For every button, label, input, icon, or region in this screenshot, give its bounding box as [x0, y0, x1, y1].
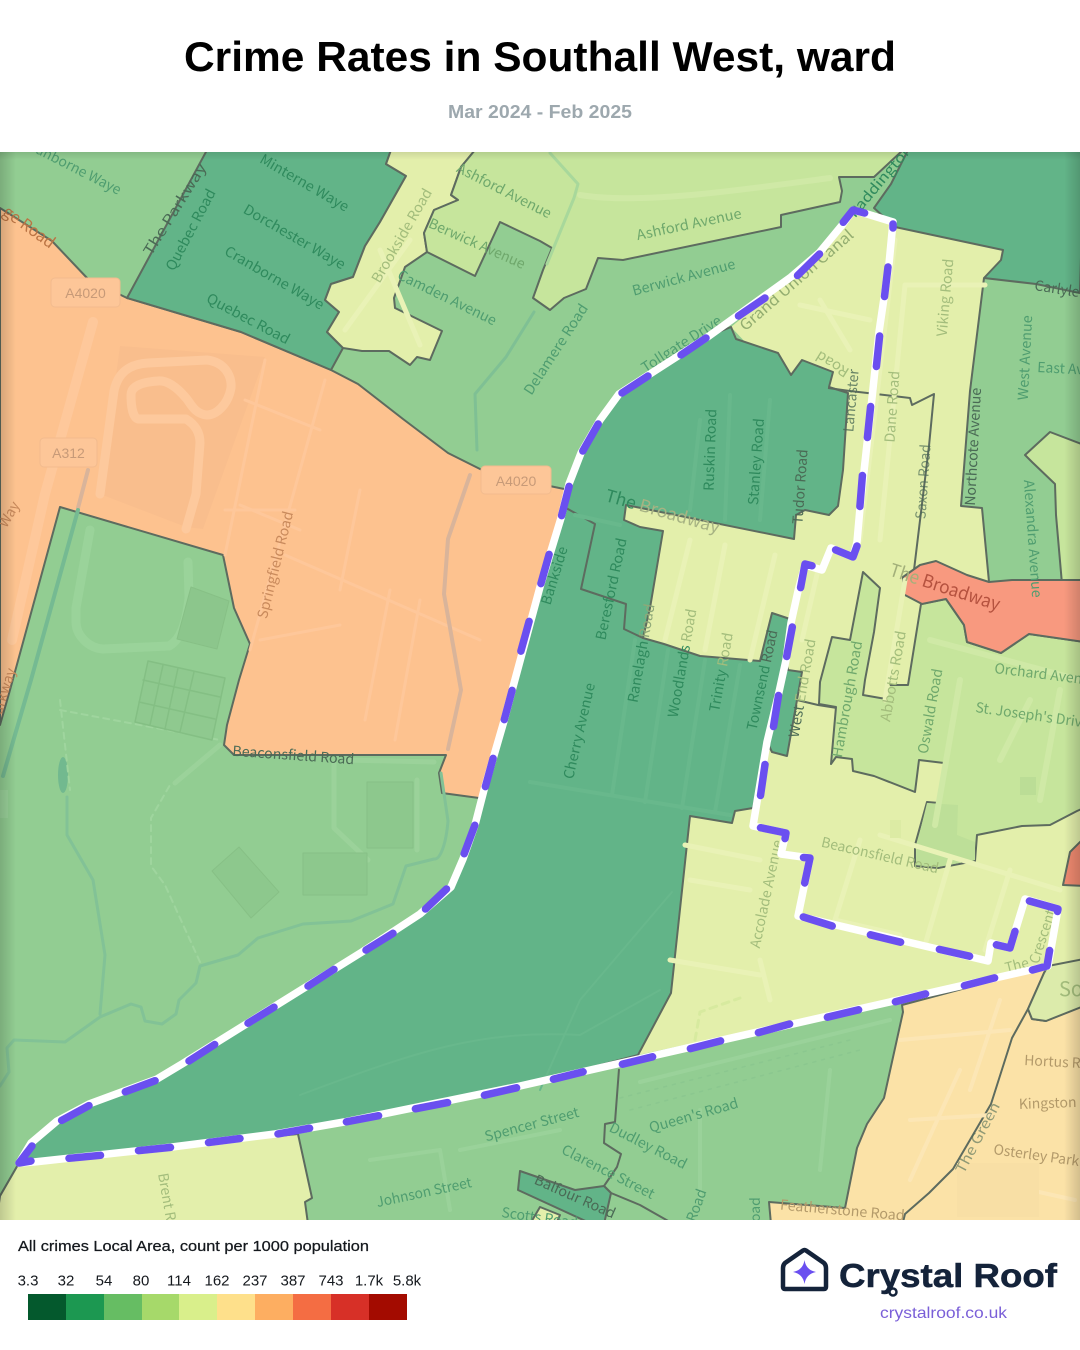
street labels: Featherstone Road [779, 1195, 906, 1225]
legend scale values: 114 [167, 1272, 191, 1290]
street labels: Balfour Road [531, 1170, 619, 1223]
street labels: Minterne Waye [256, 149, 353, 216]
street labels: Grand Union Canal [735, 224, 858, 335]
street labels: Dane Road [880, 370, 904, 443]
street labels: The Broadway [886, 556, 1004, 617]
street labels: Beresford Road [591, 536, 632, 642]
area: dark green ward block [19, 327, 848, 1163]
street labels: Hambrough Road [827, 639, 867, 759]
area: Broadway red [903, 561, 1080, 653]
street labels: Cherry Avenue [558, 681, 600, 781]
street labels: Oswald Road [913, 667, 947, 755]
road shields [40, 278, 551, 494]
street labels: The Green [950, 1099, 1005, 1177]
street labels: Road [812, 346, 853, 382]
street labels: Dorchester Waye [240, 199, 350, 274]
street labels: Brookside Road [367, 185, 437, 286]
legend scale values: 743 [318, 1272, 344, 1290]
street labels: Berwick Avenue [425, 213, 529, 274]
street labels: The Parkway [138, 159, 212, 259]
subtitle: date range: Mar 2024 - Feb 2025 [448, 102, 632, 122]
street labels: Delamere Road [519, 300, 593, 399]
street labels: Quebec Road [203, 288, 294, 349]
street labels: Saxon Road [910, 444, 936, 520]
street labels: Tollgate Drive [637, 310, 726, 377]
street labels: Scotts Road [500, 1202, 579, 1233]
street labels: West Avenue [1013, 315, 1037, 401]
legend title: All crimes Local Area, count per 1000 population [18, 1239, 369, 1255]
area: south west pale [0, 1134, 312, 1224]
street labels: Ranelagh Road [623, 602, 660, 704]
street labels: Abbotts Road [875, 629, 911, 723]
street labels: Crescent [1024, 906, 1061, 966]
area: Oswald light green [819, 572, 1080, 868]
area: tan south east [769, 966, 1080, 1224]
street labels: Lancaster [838, 368, 864, 433]
area: Quebec dark green [127, 150, 406, 370]
street labels: Townsend Road [742, 628, 782, 732]
street labels: West End Road [784, 637, 821, 739]
ward boundary: white casing with violet dashes [19, 210, 1058, 1163]
street labels: Ruskin Road [699, 409, 721, 491]
street labels: Dudley Road [606, 1117, 691, 1174]
legend scale values: 80 [133, 1272, 149, 1290]
street labels: Spencer Street [482, 1102, 582, 1146]
street labels: Berwick Avenue [630, 254, 738, 301]
icon: house with star [783, 1250, 826, 1289]
street labels: Alexandra Avenue [1019, 479, 1047, 598]
area: top right dark green [874, 150, 1080, 293]
legend scale values [18, 1272, 422, 1290]
legend scale values: 1.7k [355, 1272, 384, 1290]
legend scale values: 5.8k [393, 1272, 422, 1290]
street labels: Clarence Street [558, 1139, 659, 1204]
street labels: Cranborne Waye [20, 133, 125, 200]
street labels: Stanley Road [743, 418, 769, 506]
boundary lines [0, 278, 989, 1222]
street labels: Trinity Road [704, 631, 738, 713]
street labels: Cranborne Waye [221, 241, 328, 314]
street labels: The Broadway [603, 482, 723, 538]
area: red sliver east [1063, 838, 1080, 886]
wordmark: Crystal Roof [839, 1257, 1058, 1294]
street labels: Brent Road [153, 1171, 185, 1247]
area: orange zone [0, 208, 569, 798]
street labels: Quebec Road [161, 185, 221, 274]
legend scale values: 162 [204, 1272, 230, 1290]
street labels: The [1003, 952, 1031, 978]
logo: Crystal Roof [783, 1250, 1058, 1322]
area: Brookside pale [325, 150, 475, 365]
title: Crime Rates in Southall West, ward [184, 33, 896, 80]
legend scale values: 32 [58, 1272, 74, 1290]
website url: crystalroof.co.uk [880, 1305, 1008, 1322]
road shields: A4020 [65, 285, 106, 301]
legend scale values: 387 [280, 1272, 306, 1290]
area: Alexandra light green [1025, 432, 1080, 584]
street labels: Tudor Road [787, 449, 813, 525]
street labels: Beaconsfield Road [819, 832, 941, 878]
road shields: A4020 [496, 473, 536, 489]
area: park darker light green [916, 803, 975, 867]
road shields: A312 [52, 445, 85, 461]
street labels: Ashford Avenue [453, 158, 555, 223]
roads and parks [0, 153, 1080, 1217]
legend scale values: 237 [242, 1272, 268, 1290]
street labels: Ashford Avenue [635, 203, 744, 245]
area: pale central zone [620, 210, 1080, 1055]
area: Balfour dark green [518, 1171, 611, 1224]
street labels: ge Road [0, 199, 61, 253]
area: Ashford light green [424, 150, 903, 310]
street labels: Northcote Avenue [960, 387, 986, 506]
street labels: Accolade Avenue [745, 838, 787, 950]
street labels: Johnson Street [374, 1172, 474, 1212]
street labels: Road [745, 1197, 765, 1231]
area: bottom pale fragment [532, 1206, 561, 1220]
legend scale values: 3.3 [18, 1272, 38, 1290]
legend scale values: 54 [96, 1272, 112, 1290]
street labels: Paddington [844, 140, 917, 222]
street labels: Viking Road [932, 258, 958, 337]
area: south east pale [1028, 959, 1080, 1021]
street labels: Bankside [536, 544, 573, 607]
street labels: Camden Avenue [394, 265, 500, 330]
street labels: Springfield Road [252, 509, 298, 621]
street labels: Woodlands Road [663, 607, 701, 719]
legend [18, 1239, 422, 1320]
map edge shading [0, 152, 1080, 1220]
street labels: Beaconsfield Road [232, 741, 355, 769]
street labels: Road [681, 1186, 711, 1224]
legend colour ramp [28, 1294, 407, 1320]
street labels: Queen's Road [647, 1093, 741, 1137]
